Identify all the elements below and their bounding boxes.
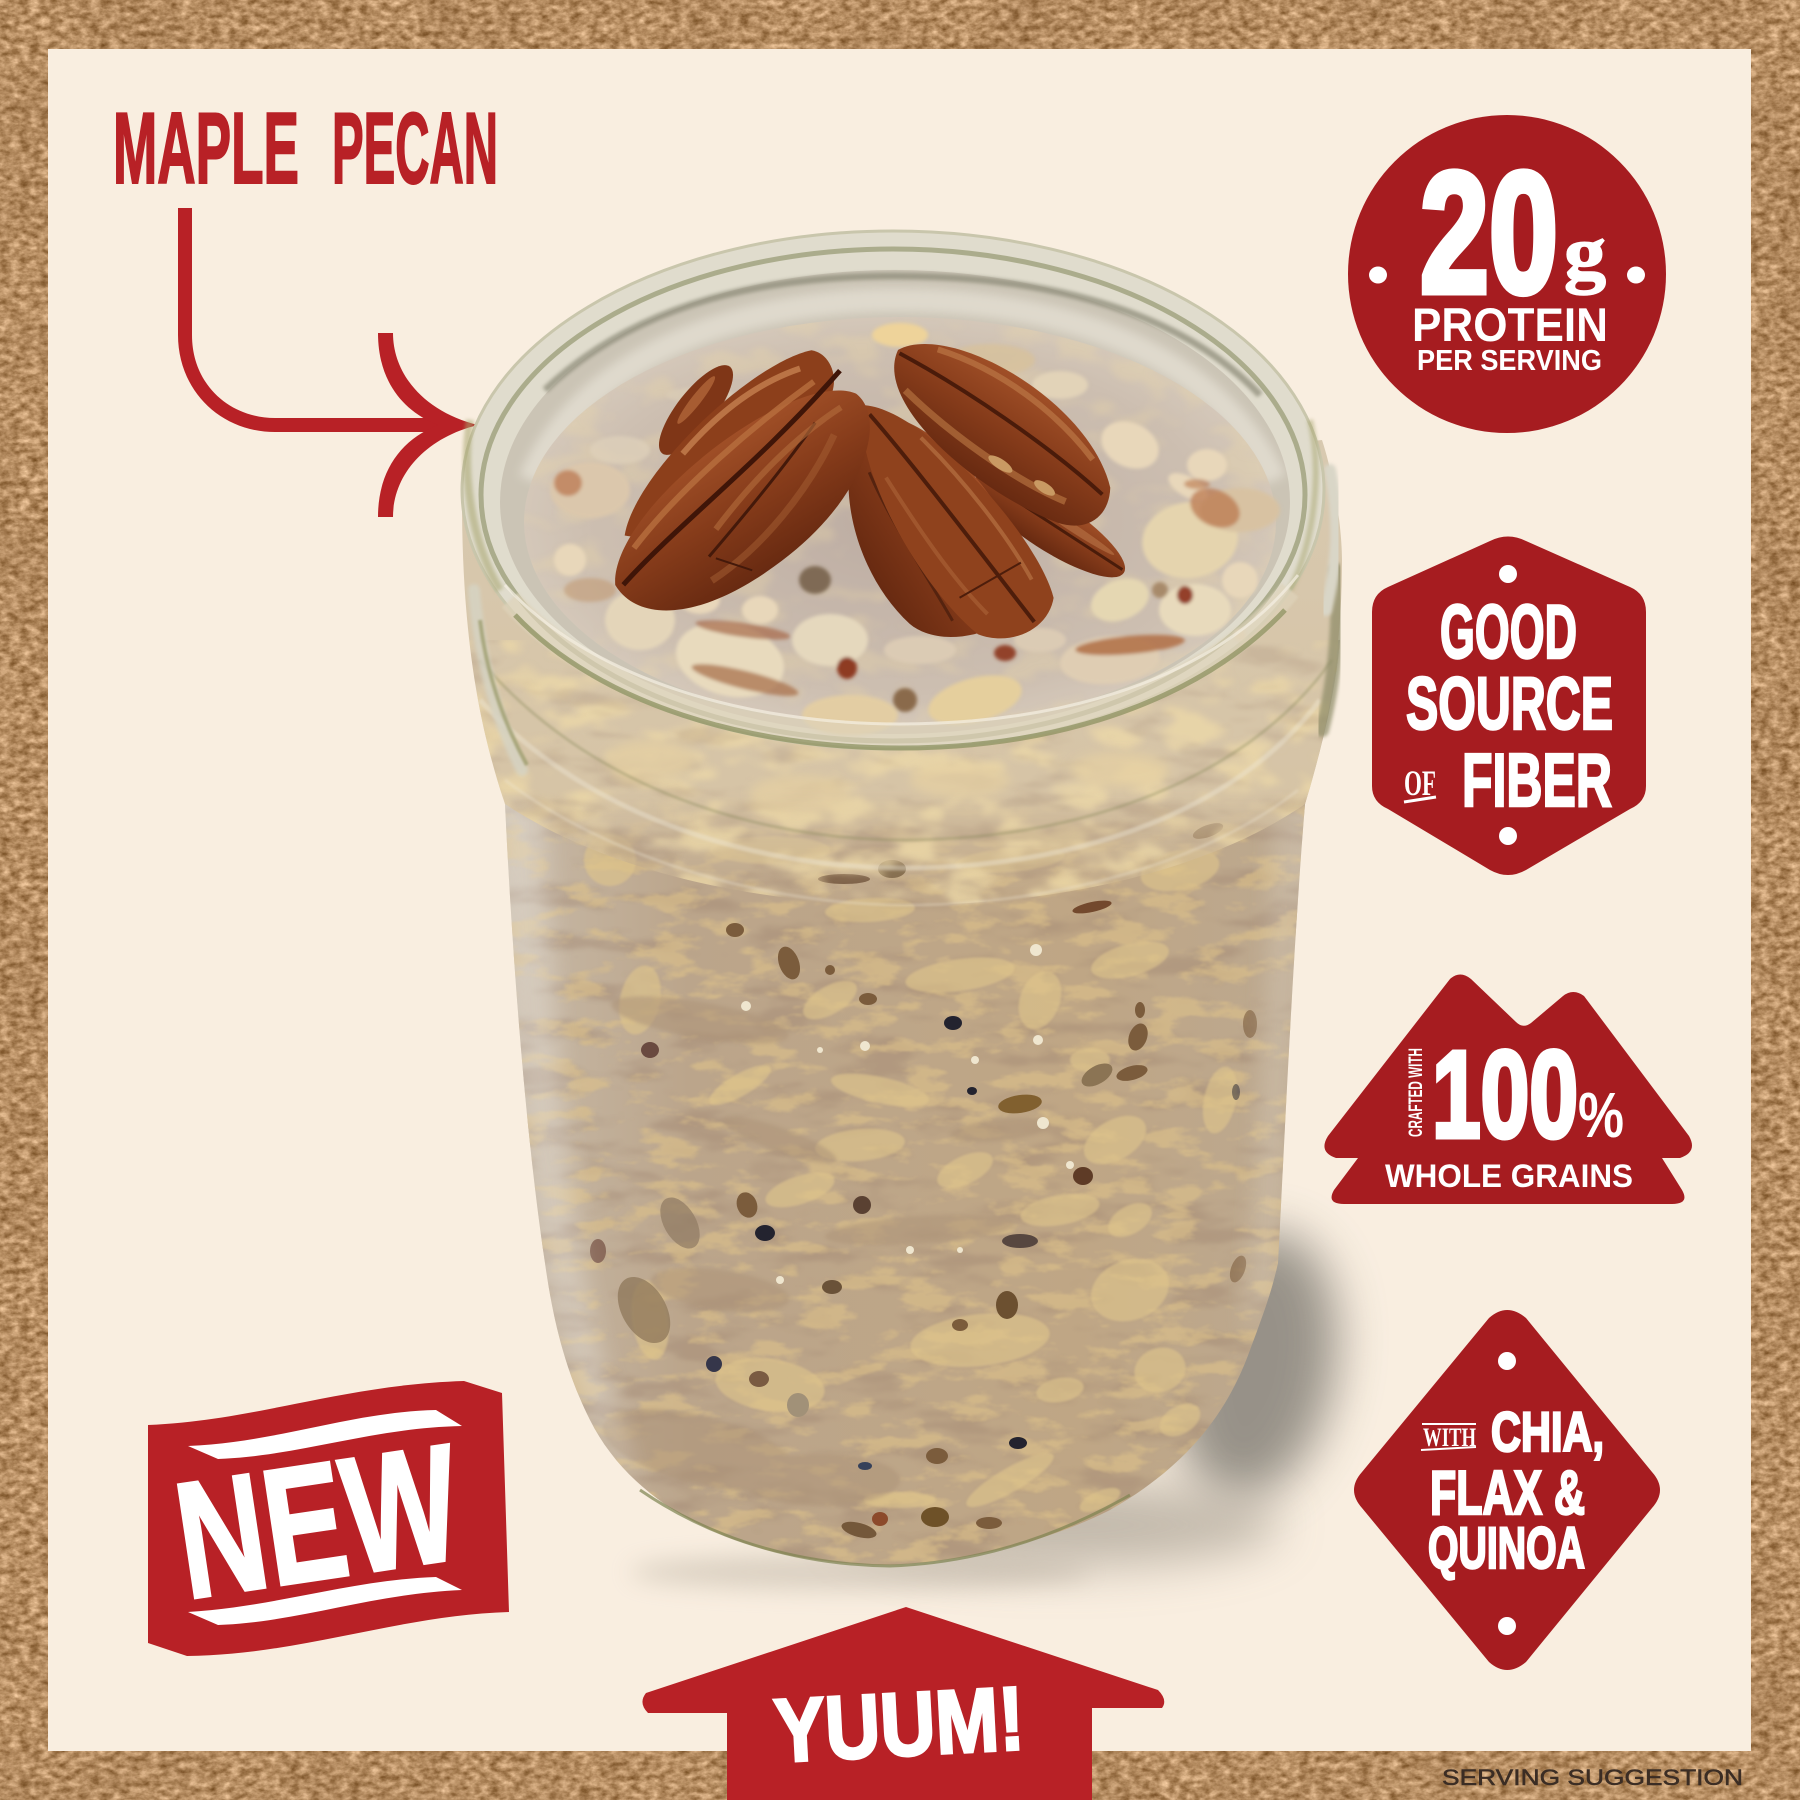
arrow from title to jar <box>178 208 478 517</box>
badge: 20g protein <box>1348 115 1666 433</box>
badge: chia flax quinoa: WITH <box>1423 1423 1476 1452</box>
badge: chia flax quinoa: QUINOA <box>1428 1516 1585 1581</box>
serving suggestion note: SERVING SUGGESTION <box>1442 1765 1743 1790</box>
jar body <box>470 640 1340 1565</box>
jar neck and threads <box>460 440 1350 910</box>
base glass edge <box>640 1490 1130 1566</box>
yuum arrow <box>642 1607 1164 1800</box>
badge: 20g protein: 20 <box>1420 137 1558 329</box>
new flag: NEW <box>165 1410 471 1635</box>
title: Maple Pecan: MAPLE <box>113 93 299 205</box>
pecan: small back left <box>647 355 745 465</box>
pecan: top right half <box>863 314 1139 546</box>
yuum arrow: YUUM! <box>772 1669 1027 1782</box>
badge: good source of fiber: GOOD <box>1440 590 1577 675</box>
badge: chia flax quinoa <box>1354 1310 1660 1670</box>
badge: 100% whole grains <box>1324 974 1692 1204</box>
badge: good source of fiber: OF <box>1404 763 1436 803</box>
badge: chia flax quinoa: CHIA, <box>1491 1400 1604 1463</box>
glass rim <box>462 231 1324 749</box>
pecans on top <box>578 314 1139 668</box>
badge: 100% whole grains: 100 <box>1432 1027 1578 1164</box>
pecan: center right front lobe <box>819 378 1072 661</box>
pecan: center half <box>800 384 1051 668</box>
badge: good source of fiber <box>1372 536 1646 875</box>
jar with oats <box>460 231 1350 1570</box>
badge: good source of fiber: SOURCE <box>1406 662 1613 745</box>
jar shadow <box>630 1218 1357 1590</box>
badge: 100% whole grains: % <box>1578 1079 1624 1151</box>
badge: 20g protein: g <box>1564 211 1606 295</box>
badge: chia flax quinoa: FLAX & <box>1430 1459 1585 1528</box>
oat clusters on surface <box>550 323 1280 735</box>
glass side glare <box>505 804 635 1469</box>
badge: good source of fiber: FIBER <box>1462 738 1612 822</box>
badge: 20g protein: PER SERVING <box>1417 345 1602 377</box>
pecan: back right sliver <box>963 456 1137 594</box>
pecan: left back half <box>595 337 858 559</box>
badge: 20g protein: PROTEIN <box>1412 298 1608 351</box>
oat texture inside body <box>505 738 1323 1568</box>
milk surface with oats <box>505 314 1298 748</box>
text: PECAN <box>332 93 498 205</box>
pecan: front left large half <box>578 365 913 643</box>
badge: 100% whole grains: CRAFTED WITH <box>1406 1048 1427 1137</box>
front rim highlight <box>505 575 1298 748</box>
badge: 100% whole grains: WHOLE GRAINS <box>1385 1158 1633 1194</box>
